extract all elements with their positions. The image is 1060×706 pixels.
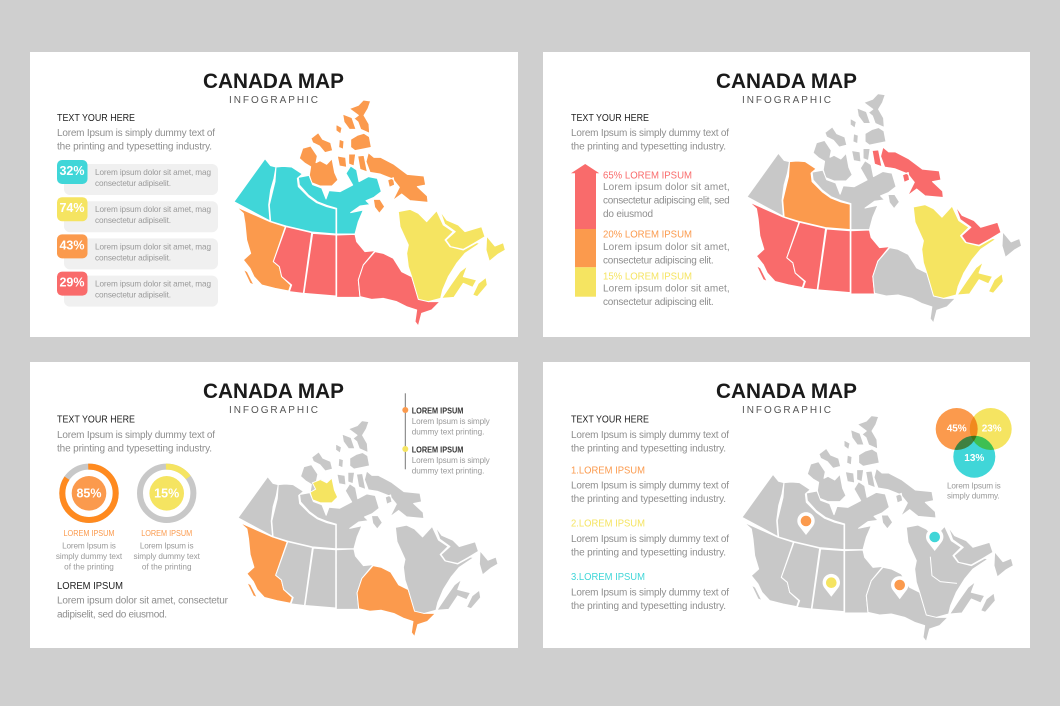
pin: yellow south (823, 574, 840, 597)
item 15%: 15% LOREM IPSUM (603, 271, 692, 282)
legend timeline: LOREM IPSUM (412, 444, 463, 454)
subtitle: INFOGRAPHIC (742, 95, 831, 106)
intro text: Lorem Ipsum is simply dummy text of (57, 128, 215, 139)
stat row 29% (57, 272, 218, 307)
donut chart 15% (140, 467, 193, 520)
heading: TEXT YOUR HERE (571, 112, 649, 124)
venn diagram (936, 408, 1012, 478)
panel: map with donut charts (30, 362, 518, 648)
title: CANADA MAP (203, 380, 344, 403)
intro text: the printing and typesetting industry. (57, 142, 212, 152)
title: CANADA MAP (203, 70, 344, 93)
intro text: the printing and typesetting industry. (57, 444, 212, 454)
list item 2: the printing and typesetting industry. (571, 548, 726, 558)
donut caption right: simply dummy text (134, 552, 201, 561)
stat row 29%: Lorem ipsum dolor sit amet, mag (95, 280, 211, 289)
intro text (57, 128, 215, 152)
stat row 74%: consectetur adipiselit. (95, 216, 171, 225)
legend timeline: LOREM IPSUM (412, 405, 463, 415)
item 20%: Lorem ipsum dolor sit amet, (603, 242, 730, 253)
stat row 29%: consectetur adipiselit. (95, 291, 171, 300)
legend timeline: Lorem Ipsum is simply (412, 417, 491, 426)
subtitle: INFOGRAPHIC (229, 405, 318, 416)
map: Canada with orange and yellow regions (238, 421, 498, 637)
legend timeline: Lorem Ipsum is simply (412, 456, 491, 465)
pin: orange east (891, 576, 908, 599)
legend timeline: dummy text printing. (412, 428, 484, 437)
donut caption right (134, 528, 201, 571)
list item 2: Lorem Ipsum is simply dummy text of (571, 534, 729, 545)
stat row 43%: consectetur adipiselit. (95, 253, 171, 262)
lower text block: LOREM IPSUM (57, 580, 123, 592)
heading: TEXT YOUR HERE (571, 414, 649, 426)
venn diagram: 45% (947, 424, 967, 435)
item 20% (603, 230, 730, 266)
item 20%: consectetur adipiscing elit. (603, 256, 714, 266)
map: Canada coloured by percentage group (234, 100, 505, 326)
donut chart 15%: 15% (154, 487, 179, 501)
stat row 74%: 74% (59, 201, 85, 215)
donut chart 85%: 85% (76, 487, 102, 501)
legend timeline (402, 393, 491, 476)
list item 1 (571, 465, 729, 505)
title: CANADA MAP (716, 70, 857, 93)
item 65%: do eiusmod (603, 209, 653, 220)
lower text block (57, 580, 229, 620)
list item 3: 3.LOREM IPSUM (571, 572, 645, 583)
stat row 32%: Lorem ipsum dolor sit amet, mag (95, 168, 211, 177)
intro text: Lorem Ipsum is simply dummy text of (571, 430, 729, 441)
item 65%: 65% LOREM IPSUM (603, 170, 692, 181)
list item 3: the printing and typesetting industry. (571, 601, 726, 612)
item 65%: Lorem ipsum dolor sit amet, (603, 182, 730, 193)
donut caption right: Lorem Ipsum is (140, 541, 194, 550)
venn diagram: 23% (982, 424, 1002, 435)
donut caption left: of the printing (64, 562, 114, 571)
donut caption left: Lorem Ipsum is (62, 541, 116, 550)
stat row 32% (57, 160, 218, 195)
subtitle: INFOGRAPHIC (742, 405, 831, 416)
stat row 43% (57, 234, 218, 269)
venn caption: simply dummy. (947, 492, 1000, 501)
intro text: the printing and typesetting industry. (571, 142, 726, 152)
subtitle: INFOGRAPHIC (229, 95, 318, 106)
list item 2: 2.LOREM IPSUM (571, 519, 645, 530)
intro text (571, 430, 729, 454)
intro text: Lorem Ipsum is simply dummy text of (57, 430, 215, 441)
venn diagram: 13% (964, 453, 984, 464)
item 15%: Lorem ipsum dolor sit amet, (603, 284, 730, 295)
lower text block: adipiselit, sed do eiusmod. (57, 609, 167, 620)
stat row 29%: 29% (59, 276, 85, 290)
item 20%: 20% LOREM IPSUM (603, 230, 692, 241)
intro text (571, 128, 729, 152)
item 65%: consectetur adipiscing elit, sed (603, 196, 730, 206)
stat row 32%: consectetur adipiselit. (95, 179, 171, 188)
title: CANADA MAP (716, 380, 857, 403)
stat row 43%: Lorem ipsum dolor sit amet, mag (95, 242, 211, 251)
panel: map with percentages (30, 52, 518, 337)
card background (543, 52, 1030, 337)
heading: TEXT YOUR HERE (57, 112, 135, 124)
list item 1: 1.LOREM IPSUM (571, 465, 645, 476)
donut caption right: of the printing (142, 562, 192, 571)
donut caption left: simply dummy text (56, 552, 123, 561)
item 65% (603, 170, 730, 220)
map: Canada with highlighted regions (747, 94, 1022, 323)
item 15%: consectetur adipiscing elit. (603, 297, 714, 308)
donut chart 85% (62, 467, 116, 520)
list item 3: Lorem Ipsum is simply dummy text of (571, 587, 729, 598)
card background (30, 52, 518, 337)
venn caption (947, 481, 1001, 501)
card background (543, 362, 1030, 648)
map: Canada in grey (742, 416, 1013, 642)
panel: map with location pins (543, 362, 1030, 648)
list item 1: the printing and typesetting industry. (571, 494, 726, 505)
intro text: Lorem Ipsum is simply dummy text of (571, 128, 729, 139)
stat row 32%: 32% (59, 164, 85, 178)
donut caption left: LOREM IPSUM (64, 528, 114, 538)
donut caption right: LOREM IPSUM (141, 528, 192, 538)
stacked arrow chart (571, 164, 599, 297)
item 15% (603, 271, 730, 308)
stat row 74%: Lorem ipsum dolor sit amet, mag (95, 205, 211, 214)
card background (30, 362, 518, 648)
intro text (57, 430, 215, 454)
intro text: the printing and typesetting industry. (571, 444, 726, 454)
venn caption: Lorem Ipsum is (947, 481, 1001, 490)
stat row 74% (57, 197, 218, 232)
legend timeline: dummy text printing. (412, 467, 484, 476)
donut caption left (56, 528, 123, 571)
heading: TEXT YOUR HERE (57, 414, 135, 426)
panel: map with arrow chart (543, 52, 1030, 337)
lower text block: Lorem ipsum dolor sit amet, consectetur (57, 595, 229, 606)
list item 2 (571, 519, 729, 558)
list item 3 (571, 572, 729, 612)
pin: orange north (797, 512, 815, 535)
list item 1: Lorem Ipsum is simply dummy text of (571, 480, 729, 491)
pin: teal north-east (926, 528, 943, 551)
stat row 43%: 43% (59, 238, 85, 252)
